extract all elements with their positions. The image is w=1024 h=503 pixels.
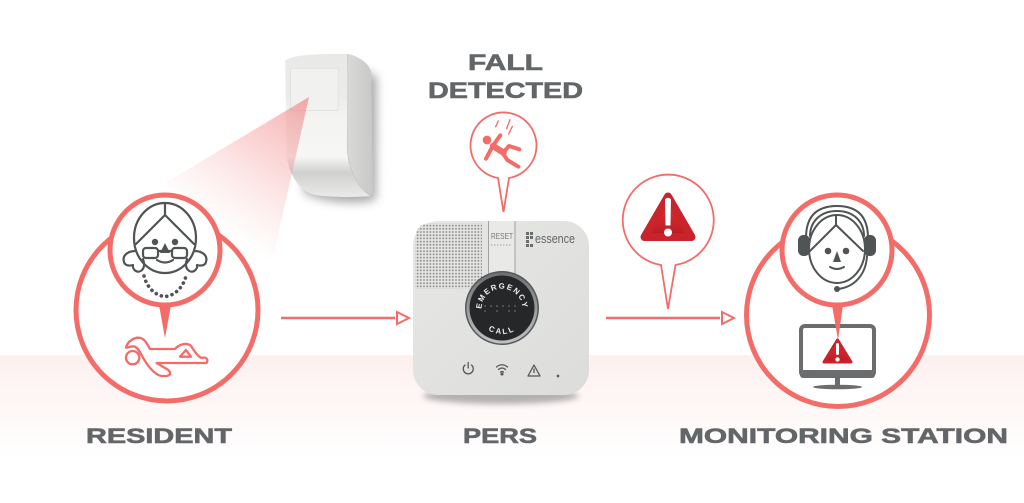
reset strip [488, 221, 515, 276]
grandmother icon [124, 203, 206, 296]
large ring [76, 219, 258, 401]
small ring [782, 195, 892, 305]
monitoring station circle [746, 195, 930, 406]
label: PERS: PERS [463, 424, 537, 448]
speaker grille [415, 223, 482, 289]
small ring [110, 195, 220, 305]
emergency call button: EMERGENCY [476, 283, 528, 308]
label: monitoring station: MONITORING STATION [679, 424, 1008, 448]
status icons [463, 362, 559, 377]
sensor lens panel [291, 69, 338, 111]
device reflection [423, 388, 579, 404]
sensor beam [150, 97, 309, 280]
arrow: PERS to monitoring station [606, 312, 734, 324]
speech pointer [832, 305, 843, 340]
icon: screen warning [824, 340, 851, 362]
arrow: resident to PERS [281, 312, 409, 324]
operator icon [798, 206, 876, 292]
floor band [0, 355, 1024, 460]
essence logo: essence [535, 231, 575, 246]
icon: falling person [483, 120, 519, 167]
heading: fall detected: FALL [468, 50, 543, 75]
heading: fall detected [428, 50, 583, 103]
fall detected bubble [470, 112, 536, 212]
heading: fall detected: DETECTED [428, 78, 583, 103]
essence logo [526, 231, 575, 247]
motion sensor [285, 54, 377, 202]
large ring [746, 224, 930, 406]
fallen person icon [126, 338, 207, 376]
emergency call button: CALL [489, 326, 514, 334]
alert bubble [623, 175, 714, 309]
speech pointer [159, 305, 171, 338]
label: resident: RESIDENT [86, 424, 232, 448]
monitor icon [800, 326, 875, 389]
emergency call button [465, 271, 539, 345]
icon: warning triangle [644, 196, 692, 237]
reset strip: RESET [491, 232, 513, 241]
PERS device [413, 221, 589, 408]
resident circle [76, 195, 258, 401]
